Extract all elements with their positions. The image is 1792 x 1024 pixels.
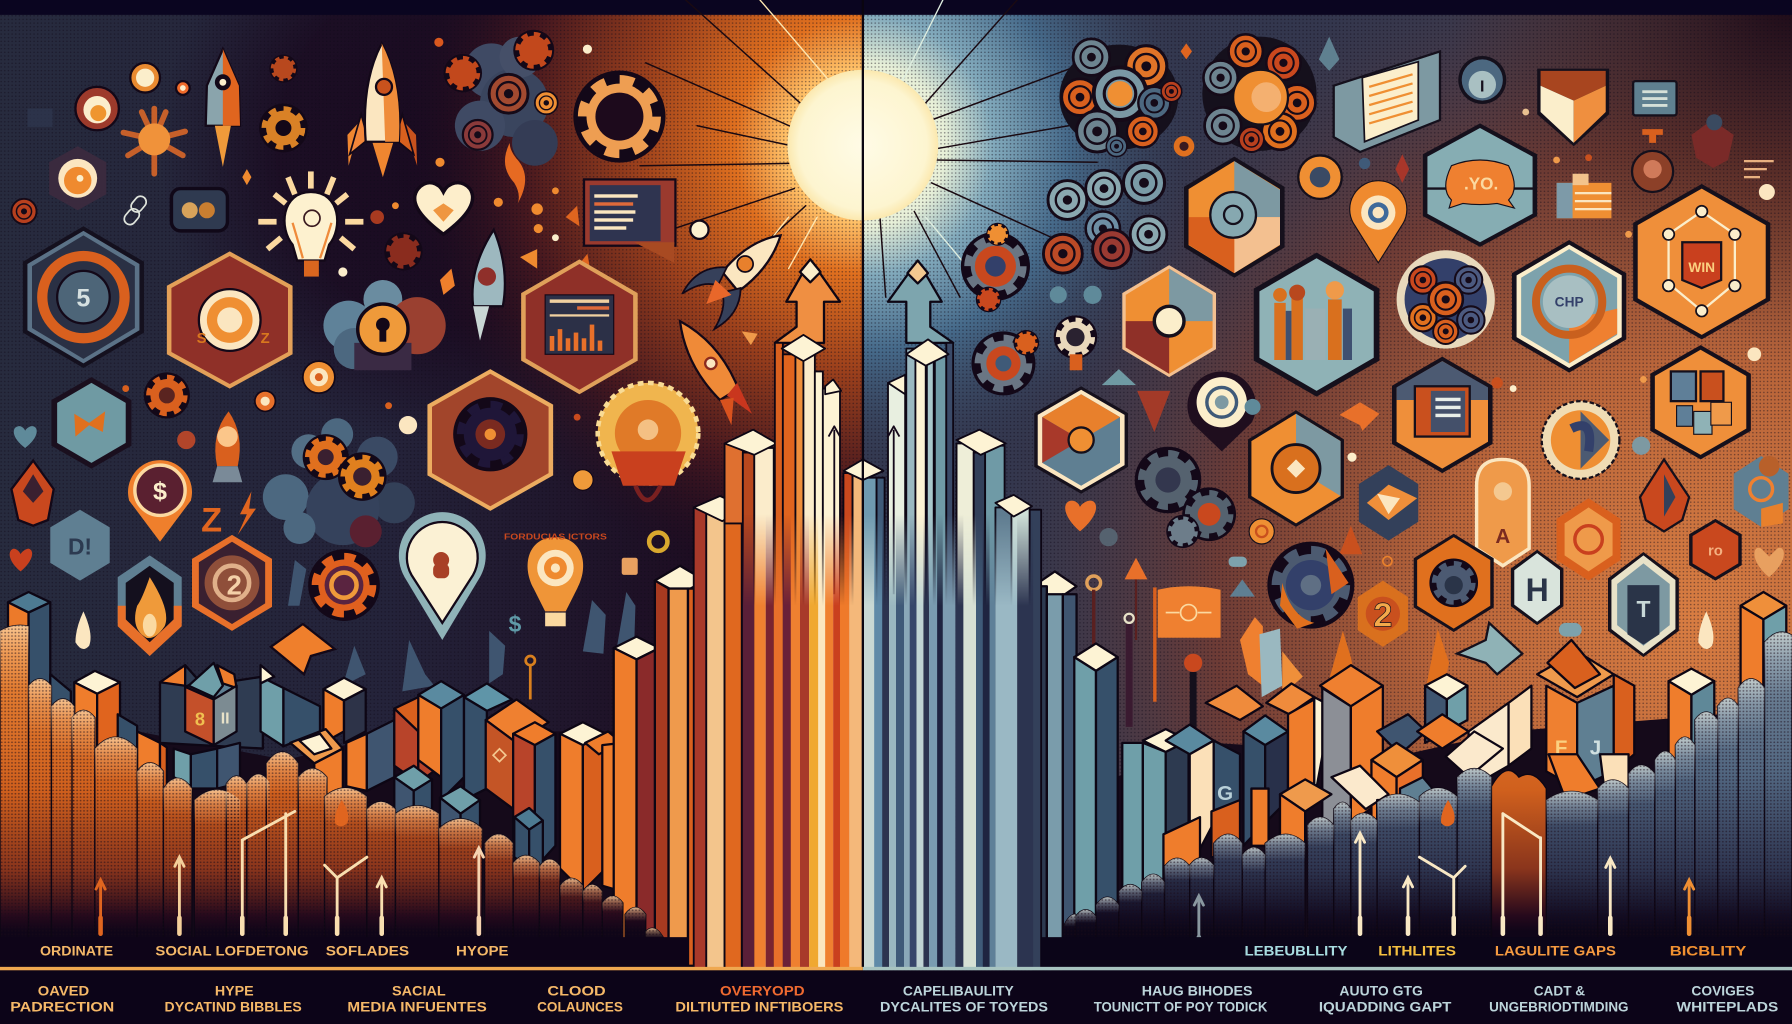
label: LITHLITES (1378, 943, 1456, 958)
lower captions right (880, 983, 1778, 1014)
icon: hex speech (1423, 123, 1537, 247)
icon: gear spiral (308, 549, 380, 621)
tall arrow right (888, 261, 953, 343)
icon: rocket upright (347, 43, 417, 177)
icon: red ring orange yolk (75, 87, 119, 130)
caption: DYCATIND BIBBLES (165, 999, 302, 1014)
column (694, 496, 745, 969)
caption: AUUTO GTG (1339, 983, 1423, 998)
icon: orange speech diamond (1339, 402, 1379, 431)
icon: broken cube (1240, 617, 1303, 697)
icon: hex people (1254, 253, 1379, 397)
icon: hex red target (167, 251, 293, 389)
icon: hex red target: S (197, 331, 207, 347)
bar lower teal (394, 766, 432, 869)
icon: hex spiral (192, 535, 272, 631)
icon: T bracket (1642, 129, 1663, 143)
icon: rocket slate (206, 49, 240, 167)
icon: tablet document (1334, 51, 1440, 152)
bar orange top (1741, 592, 1786, 709)
icon: flag (1153, 586, 1221, 702)
icon: hex quadrants (1122, 265, 1216, 377)
caption: IQUADDING GAPT (1319, 999, 1452, 1014)
small scattered dots left (242, 38, 709, 295)
icon: hex slate letters (50, 510, 110, 581)
icon: torn gear cluster (1397, 250, 1495, 349)
icon: teal triangle (1230, 579, 1255, 597)
column (888, 375, 905, 969)
bar (394, 697, 441, 783)
icon: heart outline (1754, 548, 1784, 577)
caption (1319, 983, 1452, 1014)
icon: cream pin (399, 512, 486, 640)
icon: arch badge (1477, 459, 1529, 566)
caption: COVIGES (1691, 983, 1754, 998)
caption: CLOOD (547, 983, 606, 998)
icon: gear cluster mid (961, 223, 1030, 312)
central column chart left (694, 335, 883, 969)
inner arrow (829, 426, 840, 594)
icon: hex spiral slate (1734, 456, 1789, 527)
bottom band (0, 970, 1792, 1024)
bar lower teal (514, 808, 543, 880)
bar (74, 671, 120, 789)
caption (10, 983, 114, 1014)
symbol on bar: G (1217, 782, 1233, 805)
icon: red heart (10, 549, 32, 571)
pole (377, 878, 386, 934)
icon: small panel (27, 109, 53, 127)
icon: blob cluster (1043, 162, 1167, 273)
icon: teal heart (14, 426, 37, 448)
icon: ring badge (130, 63, 160, 93)
icon: dollar pin: $ (153, 477, 167, 505)
bar diamond (290, 720, 394, 823)
pole (1685, 880, 1694, 934)
bar orange (1320, 665, 1383, 846)
caption: OVERYOPD (720, 983, 805, 998)
icon: hex teal bow (51, 377, 131, 469)
decorative dots right (1245, 109, 1779, 477)
icon: triangle warn (1125, 558, 1147, 640)
label strip right (1041, 937, 1792, 969)
bar tall (655, 566, 705, 966)
icon: teal pill (1559, 623, 1582, 637)
icon: flame shield (118, 555, 182, 656)
icon: orange bulb (528, 537, 583, 626)
icon: number badge: 2 (1373, 596, 1392, 634)
halftone column wall right (1063, 632, 1792, 983)
icon: hex circle (1248, 410, 1344, 527)
icon: kite right (1640, 459, 1689, 531)
label: dollar: $ (509, 611, 522, 637)
right icon field (961, 34, 1789, 729)
halftone column wall left (0, 625, 669, 983)
caption: HYPE (215, 983, 254, 998)
bar (464, 683, 512, 800)
icon: slate circle: I (1480, 78, 1485, 95)
centre divider (862, 0, 864, 969)
box with letters: J (1590, 736, 1601, 759)
dark ground behind bars (0, 709, 1792, 983)
bar (1243, 715, 1288, 846)
slate shards (288, 560, 635, 691)
caption: WHITEPLADS (1677, 999, 1778, 1014)
icon: ring (255, 391, 275, 411)
icon: cream flame (75, 611, 91, 649)
bars teal below box (174, 743, 240, 789)
label: SOFLADES (326, 943, 409, 958)
icon: gear orange slate (971, 330, 1039, 395)
icon: hex spiral: 2 (227, 569, 242, 600)
column (775, 335, 825, 969)
pole (1355, 833, 1365, 934)
icon: hex target quadrants (1184, 157, 1285, 278)
column (823, 379, 841, 969)
bar lower (1251, 766, 1400, 891)
icon: lines (1744, 160, 1774, 178)
icon: cream flame right (1698, 611, 1713, 649)
pole (242, 811, 295, 934)
pole (1503, 814, 1541, 934)
arrow poles left (96, 811, 483, 934)
flame droplets (335, 800, 1455, 826)
rule right (863, 967, 1792, 970)
icon: badge gear (1542, 401, 1619, 479)
icon: dark cloud gears (263, 418, 415, 547)
right background panel (863, 0, 1792, 1024)
icon: hex chart (521, 259, 638, 394)
caption: DYCALITES OF TOYEDS (880, 999, 1048, 1014)
box with letters: 8 (195, 709, 205, 730)
icon: ring pole (1125, 614, 1134, 727)
icon: orange arrow diamond (271, 624, 335, 674)
upper axis labels right (1245, 943, 1746, 958)
icon: rocket tilted (682, 235, 781, 329)
icon: hex envelope (1034, 386, 1128, 494)
pole (474, 848, 483, 934)
icon: table (1557, 174, 1611, 218)
upper axis labels left (40, 943, 509, 958)
bar cream (1669, 669, 1714, 789)
icon: key (526, 656, 535, 699)
bar (118, 714, 137, 800)
bar (323, 678, 366, 743)
icon: slate circle (1458, 56, 1506, 104)
icon: red circle (1184, 654, 1202, 729)
left icon field (10, 30, 781, 699)
icon: hex doc (1392, 357, 1493, 473)
icon: hex spiral right (1557, 498, 1621, 581)
bar (513, 722, 555, 869)
icon: teal pill (1229, 557, 1247, 567)
icon: gear cluster lower (1267, 542, 1354, 629)
icon: small gear (269, 54, 298, 83)
icons: twin dots (1050, 286, 1102, 304)
icon: hex slate letters: D! (68, 533, 92, 559)
caption: OAVED (38, 983, 89, 998)
bar (1166, 725, 1240, 869)
icon: arch badge: A (1495, 525, 1510, 548)
label: LAGULITE GAPS (1495, 943, 1616, 958)
icon: rocket tilted down (680, 321, 752, 425)
caption (880, 983, 1048, 1014)
column (957, 430, 1006, 969)
bar (486, 699, 549, 811)
pole (96, 880, 105, 934)
icon: lightning (238, 491, 256, 535)
icon: book shield (1537, 69, 1609, 146)
icon: slate gears (1135, 447, 1236, 548)
icon: heart (415, 183, 473, 234)
icon: gold ring right of bulb (649, 533, 667, 551)
bar mid lower (1371, 743, 1423, 846)
sun rays (640, 0, 1097, 297)
icon: sunflower (598, 383, 698, 500)
icon: hex blocks (1650, 345, 1751, 459)
icon: pin target (1350, 181, 1407, 263)
bar orange (1206, 683, 1331, 811)
caption: PADRECTION (10, 999, 114, 1014)
caption: CADT & (1534, 983, 1585, 998)
caption: CAPELIBAULITY (903, 983, 1014, 998)
icon: big gear (573, 70, 666, 163)
icon: hex T: T (1636, 596, 1650, 622)
icons: diamonds (1181, 37, 1409, 183)
label: HYOPE (456, 943, 509, 958)
icon: number badge (1358, 581, 1408, 647)
icon: ring cluster one (1059, 39, 1182, 157)
box with letters: F (1555, 736, 1567, 759)
icon: hex slate small (1359, 465, 1418, 541)
caption: MEDIA INFUENTES (347, 999, 487, 1014)
icon: hex slate ring: 5 (76, 284, 90, 312)
icon: hex teal ring: CHP (1555, 294, 1584, 309)
bar diamond (1400, 714, 1503, 823)
central stripes left (743, 503, 863, 969)
icon: ring dot (1174, 136, 1194, 157)
bar lower teal (440, 786, 480, 846)
column (725, 430, 777, 969)
lower captions left (10, 983, 843, 1014)
icon: triangle marker (742, 331, 758, 345)
caption (1677, 983, 1778, 1014)
icon: brown ring (1632, 151, 1673, 192)
icon: sun (123, 109, 185, 174)
icon: hex teal ring (1512, 240, 1626, 373)
pole (1403, 878, 1413, 934)
icon: light bulb (258, 171, 363, 277)
icon: teal arrow diamond (1457, 623, 1522, 674)
icon: hex gear (1414, 534, 1494, 632)
bar lower (1163, 800, 1240, 880)
bar (137, 731, 167, 834)
icon: hex speech: .YO. (1464, 174, 1498, 194)
box with letters: II (221, 710, 230, 727)
pole (175, 857, 184, 934)
left background panel (0, 14, 862, 758)
label: SOCIAL LOFDETONG (155, 943, 309, 958)
icon: chain (122, 194, 149, 227)
column (843, 459, 883, 969)
central stripes right (863, 503, 1033, 969)
icon: document speech panel (566, 179, 675, 263)
isometric bars right (1033, 571, 1786, 969)
icon: slate note (1633, 81, 1677, 115)
icons: small orange coin and triangle (1099, 519, 1392, 566)
bar (50, 674, 71, 731)
pole (1194, 896, 1203, 952)
icon: hex T (1608, 552, 1679, 657)
icon: hex red target: Z (261, 331, 270, 347)
icon: orange ring (1298, 155, 1342, 199)
bar tall (1033, 571, 1077, 969)
icon: ring large (303, 361, 335, 393)
icon: wavy flame (505, 143, 525, 203)
rule left (0, 967, 863, 970)
bar cream (1469, 686, 1531, 789)
column (906, 339, 953, 969)
icon: orange heart (1065, 501, 1096, 531)
icon: rocket blue (472, 230, 505, 341)
icon: hex ring dark (49, 146, 106, 210)
icon: rounded box (171, 189, 227, 231)
caption (1489, 983, 1629, 1014)
icon: hex network: WIN (1688, 260, 1715, 275)
curved tiny caption: FORDUCIAS ICTORS (504, 531, 607, 541)
icon: gear gold (259, 104, 308, 152)
icon: hex orange small: ro (1708, 543, 1723, 559)
bar slate (1377, 674, 1467, 754)
caption (347, 983, 487, 1014)
icon: hex slate ring (23, 226, 144, 368)
icon: cloud keyhole (323, 280, 446, 370)
icon: kite shield (11, 461, 54, 526)
icon: orange gear (144, 372, 190, 418)
caption: TOUNICTT OF POY TODICK (1094, 999, 1268, 1014)
column (995, 495, 1041, 969)
top dark band (0, 0, 1792, 15)
icon: red burst (384, 232, 423, 271)
pole (325, 857, 367, 934)
icons: triangles (1102, 369, 1170, 432)
icon: spiral small (11, 199, 37, 224)
icon: ring pin (1187, 371, 1256, 451)
icon: orange flame spikes (1326, 629, 1449, 691)
caption (1094, 983, 1268, 1014)
bar (8, 592, 50, 800)
icon: small stacked box (622, 558, 638, 575)
icon: shield H: H (1526, 572, 1549, 608)
icon: shield H (1511, 550, 1563, 625)
icon: hex network (1633, 184, 1770, 339)
caption (165, 983, 302, 1014)
pole (1419, 857, 1465, 934)
bar (560, 722, 622, 891)
icon: ring cluster two (1202, 34, 1317, 152)
column top centre (863, 459, 883, 480)
caption: COLAUNCES (537, 999, 623, 1014)
icon: cream gear (1054, 315, 1097, 370)
icon: dollar pin (128, 460, 192, 542)
label: LEBEUBLLITY (1245, 943, 1347, 958)
icon: letter Z: Z (201, 501, 222, 539)
arrow poles right (1194, 814, 1694, 952)
label strip left (0, 937, 688, 969)
column (863, 478, 885, 969)
label: ORDINATE (40, 943, 113, 958)
box with letters (1537, 640, 1634, 789)
icon: hex gear brown (427, 369, 553, 511)
bar symbol: ◇ (491, 743, 507, 764)
caption: UNGEBRIODTIMDING (1489, 999, 1629, 1014)
pole (1606, 858, 1615, 934)
bar tall (614, 637, 659, 960)
icon: cream dot (1759, 184, 1775, 200)
bar lower right (1549, 754, 1629, 800)
caption: DILTIUTED INFTIBOERS (675, 999, 843, 1014)
bar (1122, 729, 1189, 914)
tall arrow left (775, 259, 840, 343)
caption: HAUG BIHODES (1142, 983, 1253, 998)
icon: dot (176, 81, 190, 95)
box with letters (160, 663, 263, 749)
panel teal (261, 665, 320, 746)
caption (537, 983, 623, 1014)
icon: dark red polygon person (1691, 114, 1734, 168)
inner arrow (888, 426, 899, 594)
central column chart right (863, 339, 1041, 969)
icon: gear cluster dark (444, 30, 558, 166)
bar tall (1074, 643, 1118, 949)
icons: dots (122, 385, 593, 490)
icon: teardrop key (1087, 576, 1101, 651)
bar (418, 681, 464, 800)
caption (675, 983, 843, 1014)
caption: SACIAL (392, 983, 446, 998)
icon: hex orange small (1689, 519, 1742, 581)
isometric bars left (8, 566, 705, 966)
sun (787, 70, 938, 221)
icon: torch (213, 411, 242, 482)
label: BICBLITY (1670, 943, 1746, 958)
